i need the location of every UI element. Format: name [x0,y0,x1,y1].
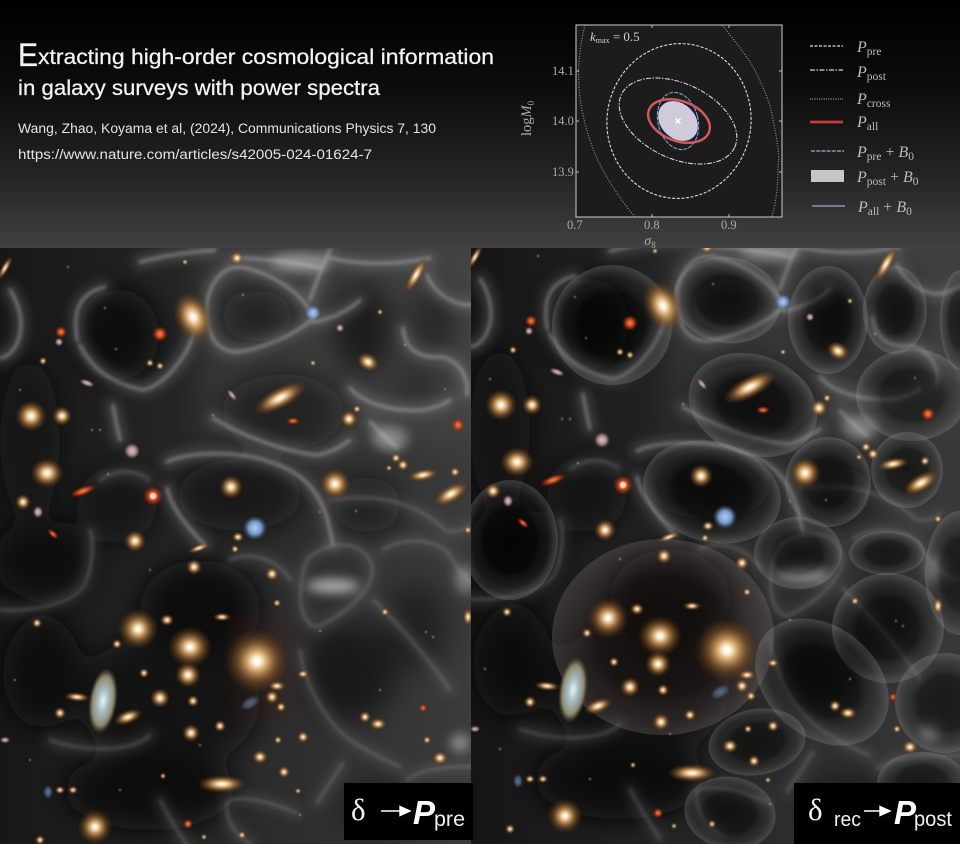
legend: all [867,121,878,133]
legend: 0 [906,206,912,218]
legend: all [868,206,879,218]
legend [810,39,919,218]
arrow: post label [864,806,890,816]
chart axis labels: logM [519,105,535,136]
chart annotation: = 0.5 [610,29,640,44]
chart axis labels: 0.7 [567,218,583,232]
label box: pre-reconstruction: P [413,794,436,831]
legend: + [886,169,903,186]
citation [18,121,436,162]
chart contours [579,25,779,217]
label box: post-reconstruction: P [894,794,917,831]
chart axis labels: 0.8 [644,218,660,232]
chart ticks [576,25,782,217]
arrow: pre label [381,806,410,816]
legend: P [857,114,867,131]
label box: post-reconstruction [794,783,960,844]
legend: cross [867,98,891,110]
label box: pre-reconstruction [344,783,473,840]
legend: B [898,144,908,161]
legend: pre [867,151,881,163]
title: xtracting high-order cosmological information [38,45,494,69]
label box: post-reconstruction: δ [808,792,823,827]
legend: + [881,144,898,161]
chart axis labels: 0.9 [721,218,737,232]
title: in galaxy surveys with power spectra [18,76,380,100]
legend: B [896,199,906,216]
contour chart [519,25,782,250]
marker: true value [676,118,680,124]
title [18,37,494,100]
header background [0,0,960,248]
legend: pre [867,46,881,58]
label box: post-reconstruction: post [914,808,952,831]
legend: P [857,144,867,161]
chart axis labels: 0 [526,100,536,105]
chart axis labels: 14.1 [552,64,574,78]
panel: right galaxy field with reconstructed voids [460,219,960,844]
chart axis labels: 14.0 [552,114,574,128]
legend: 0 [908,151,914,163]
legend: P [857,169,867,186]
legend: P [857,91,867,108]
chart axis labels: 8 [651,240,656,250]
legend: P [858,199,868,216]
legend: post [867,176,887,188]
title: E [18,37,38,73]
label box: post-reconstruction: rec [834,809,861,831]
legend: B [903,169,913,186]
citation: https://www.nature.com/articles/s42005-024-01624-7 [18,147,372,162]
chart axis labels: σ [644,234,651,249]
legend: post [867,71,887,83]
chart annotation: max [596,36,610,45]
panel: left galaxy field with pre-reconstruction web [0,248,471,844]
legend: + [879,199,896,216]
chart axis labels [519,64,737,250]
chart annotation: k [590,29,596,44]
legend: 0 [913,176,919,188]
legend: P [857,64,867,81]
chart axis labels: 13.9 [552,165,574,179]
citation: Wang, Zhao, Koyama et al, (2024), Communications Physics 7, 130 [18,121,436,136]
label box: pre-reconstruction: pre [434,808,465,831]
legend: P [857,39,867,56]
label box: pre-reconstruction: δ [351,792,366,827]
